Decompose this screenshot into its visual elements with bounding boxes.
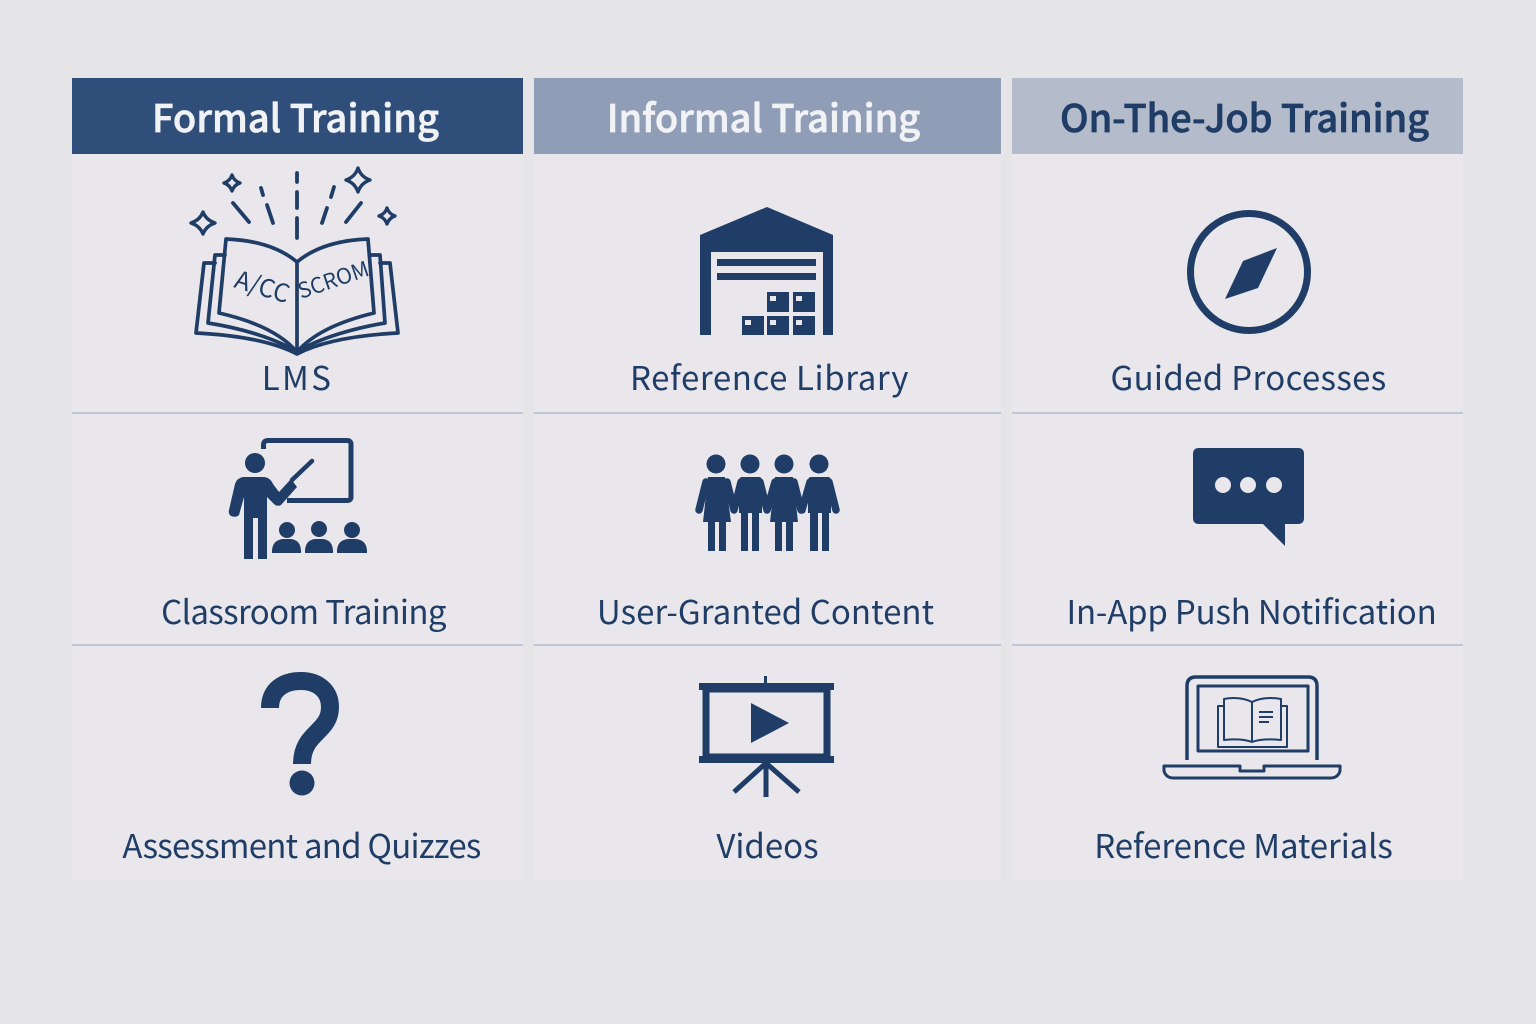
panel: formal training column [72,154,523,880]
page background: SCROM [293,252,373,306]
heading: Formal Training [72,78,523,154]
icon: warehouse library [700,207,833,335]
label: Reference Library: Reference Library [630,352,909,400]
icon: chat bubble [1193,448,1304,546]
icon: laptop with book [1162,675,1342,780]
heading: On-The-Job Training: On-The-Job Training [1060,88,1429,143]
panel: informal training column [534,154,1001,880]
label: LMS: LMS [262,352,333,400]
panel: on-the-job training column [1012,154,1463,880]
icon: question mark [261,672,339,796]
icon: group of people [695,454,840,551]
label: Classroom Training: Classroom Training [161,586,446,634]
label: User-Granted Content: User-Granted Content [597,586,934,634]
heading: Informal Training [534,78,1001,154]
icon: compass [1187,210,1311,334]
label: Assessment and Quizzes: Assessment and Quizzes [122,820,481,868]
heading: Informal Training: Informal Training [607,88,920,143]
label: Reference Materials: Reference Materials [1094,820,1393,868]
icon: video projector screen [699,676,834,797]
label: Videos: Videos [716,820,819,868]
heading: Formal Training: Formal Training [152,88,439,143]
label: Guided Processes: Guided Processes [1110,352,1386,400]
label: In-App Push Notification: In-App Push Notification [1066,586,1437,634]
page background: A/CC [231,260,295,311]
icon: classroom teacher [228,438,367,559]
icon: open book with sparkles [189,166,400,356]
